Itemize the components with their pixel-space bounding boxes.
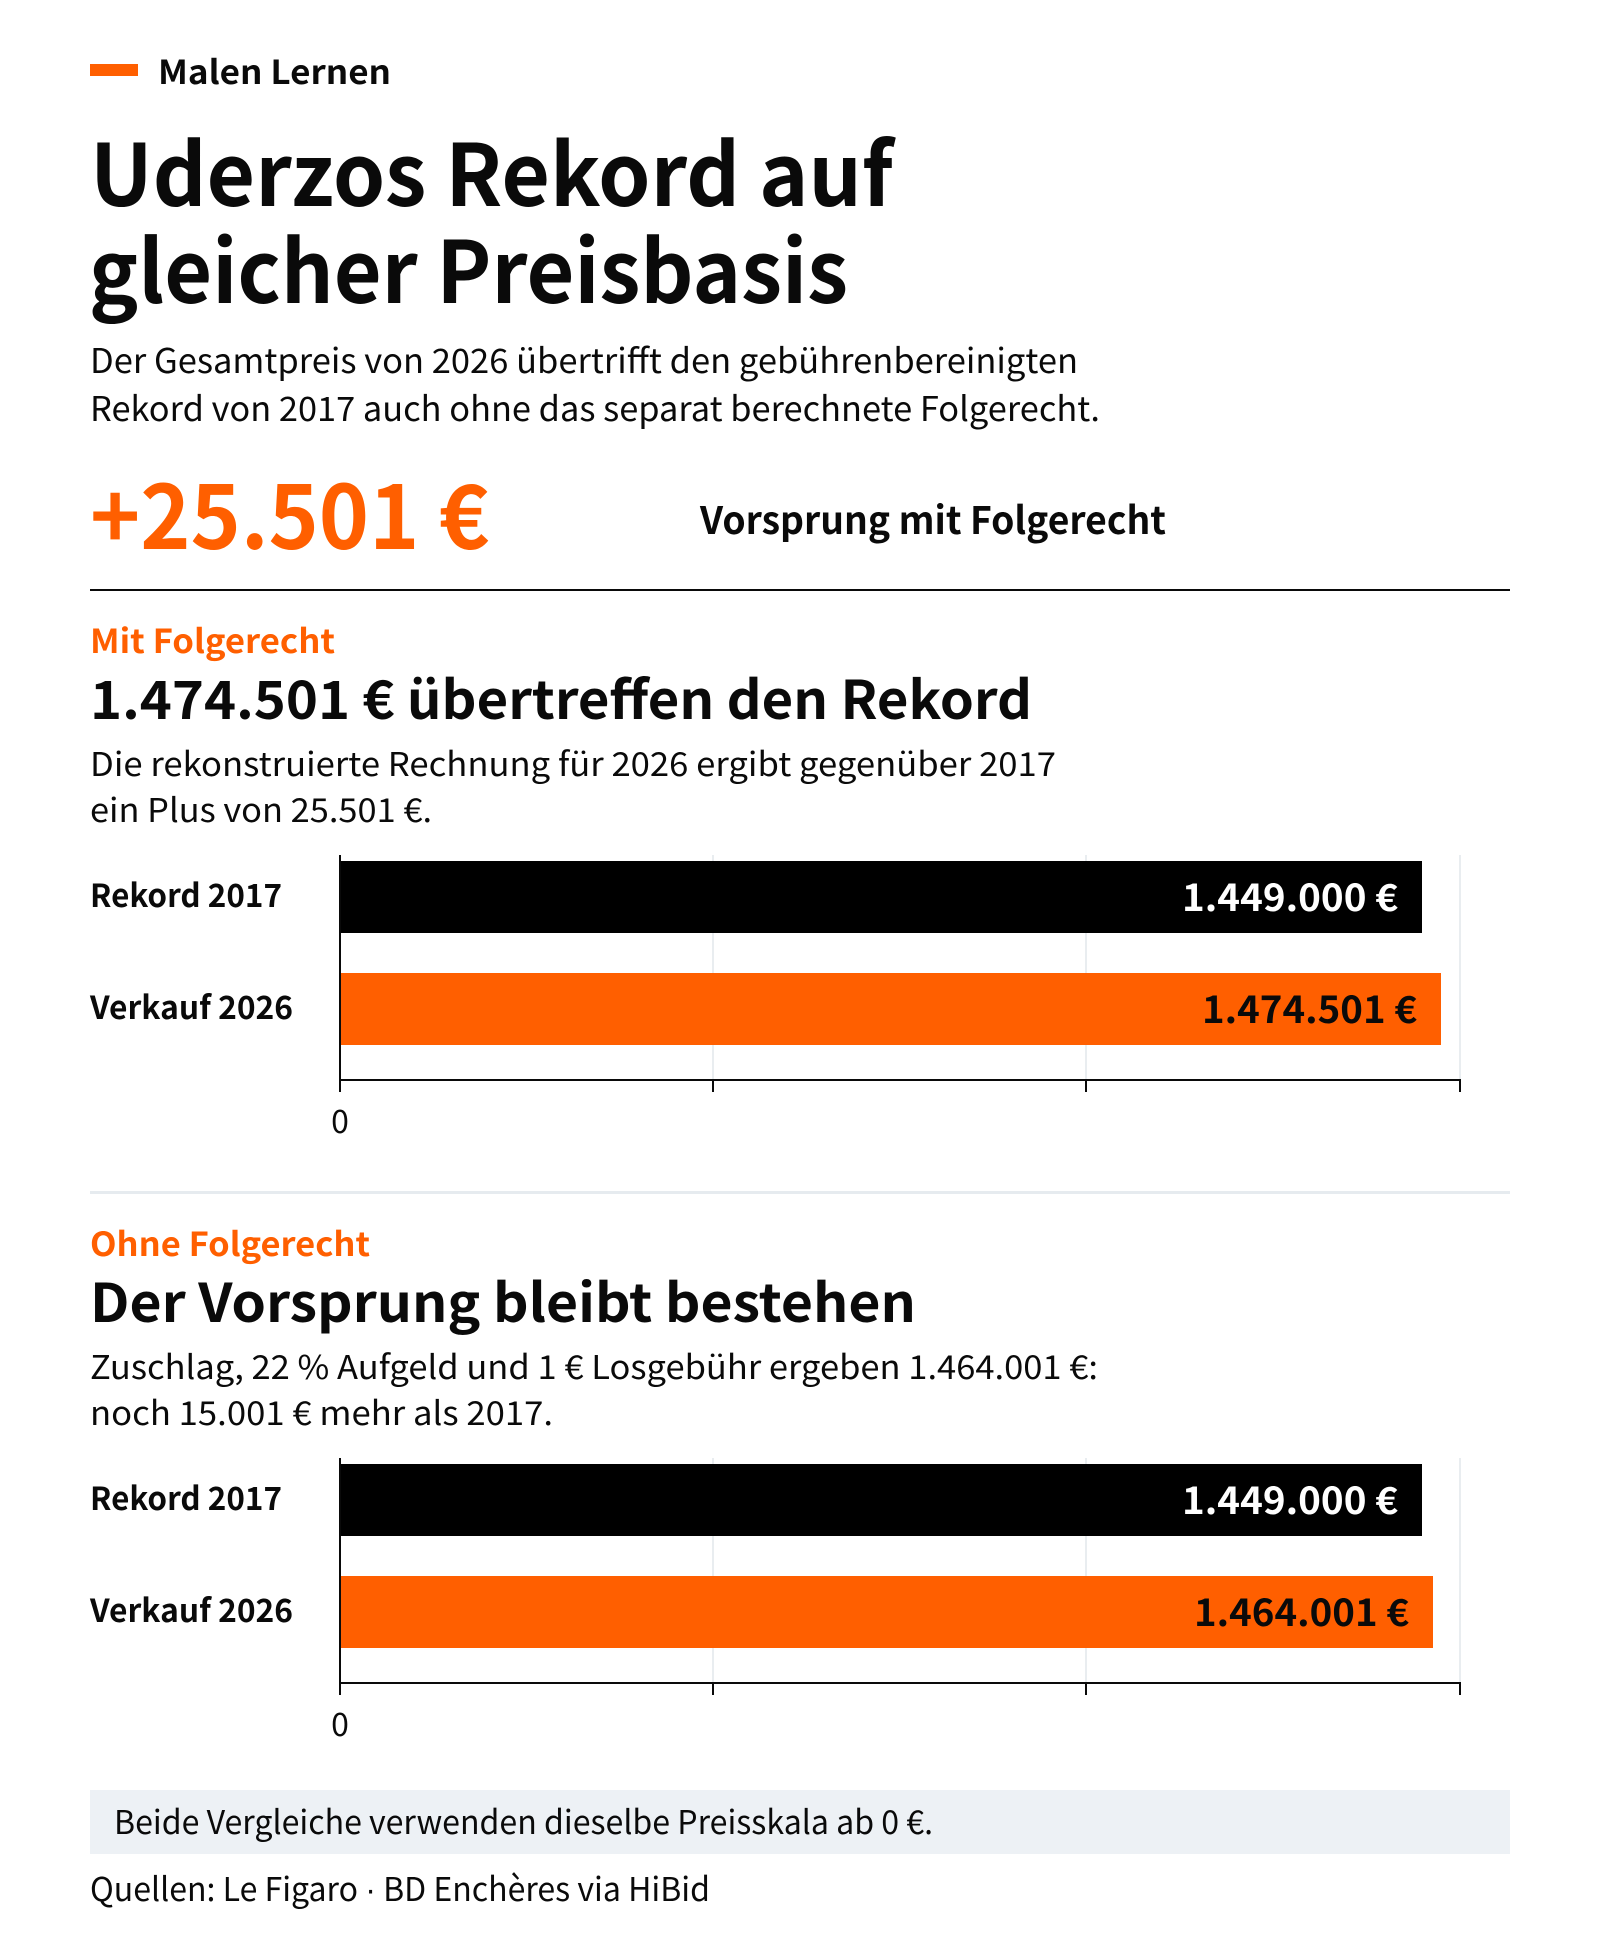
bar: Verkauf 2026: Verkauf 2026: [89, 1586, 293, 1632]
title: [89, 106, 896, 328]
axis: 0: [331, 1097, 349, 1143]
bar: Verkauf 2026: 1.474.501 €: [1202, 980, 1417, 1034]
bar: Verkauf 2026: Verkauf 2026: [89, 983, 293, 1029]
section description: noch 15.001 € mehr als 2017.: [90, 1387, 553, 1435]
bar: Rekord 2017: [90, 1464, 1422, 1536]
bar chart: Ohne Folgerecht: [89, 1458, 1461, 1746]
subtitle: Rekord von 2017 auch ohne das separat berechnete Folgerecht.: [90, 382, 1100, 431]
key figure: +25.501 €: [90, 448, 489, 575]
key figure: Vorsprung mit Folgerecht: [699, 490, 1166, 545]
panel: Ohne Folgerecht: [89, 1218, 1461, 1746]
bar: Rekord 2017: Rekord 2017: [90, 871, 282, 917]
bar: Verkauf 2026: 1.464.001 €: [1194, 1583, 1409, 1637]
title: gleicher Preisbasis: [89, 203, 848, 328]
note box: Beide Vergleiche verwenden dieselbe Preisskala ab 0 €.: [114, 1796, 933, 1844]
bar: Rekord 2017: 1.449.000 €: [1182, 1471, 1398, 1525]
sources: Quellen: Le Figaro · BD Enchères via HiBid: [90, 1863, 710, 1911]
subtitle: [90, 334, 1100, 431]
bar: Rekord 2017: [90, 861, 1422, 933]
note box: [90, 1790, 1510, 1854]
kicker: Malen Lernen: Malen Lernen: [158, 46, 391, 94]
subtitle: Der Gesamtpreis von 2026 übertrifft den gebührenbereinigten: [90, 334, 1078, 383]
panel: Mit Folgerecht: [89, 615, 1461, 1143]
axis: 0: [331, 1700, 349, 1746]
section description: Zuschlag, 22 % Aufgeld und 1 € Losgebühr ergeben 1.464.001 €:: [90, 1341, 1098, 1389]
section description: [90, 1341, 1098, 1435]
bar: Rekord 2017: 1.449.000 €: [1182, 868, 1398, 922]
section description: [90, 738, 1056, 832]
bar: Verkauf 2026: [89, 973, 1441, 1045]
bar: Rekord 2017: Rekord 2017: [90, 1474, 282, 1520]
section heading: 1.474.501 € übertreffen den Rekord: [90, 659, 1032, 735]
section description: Die rekonstruierte Rechnung für 2026 ergibt gegenüber 2017: [90, 738, 1056, 786]
section label: Ohne Folgerecht: [90, 1218, 370, 1266]
bar: Verkauf 2026: [89, 1576, 1433, 1648]
title: Uderzos Rekord auf: [90, 106, 896, 231]
section heading: Der Vorsprung bleibt bestehen: [90, 1262, 916, 1338]
section description: ein Plus von 25.501 €.: [90, 784, 432, 832]
key figure: [90, 448, 1166, 575]
section label: Mit Folgerecht: [90, 615, 335, 663]
bar chart: Mit Folgerecht: [89, 855, 1461, 1143]
